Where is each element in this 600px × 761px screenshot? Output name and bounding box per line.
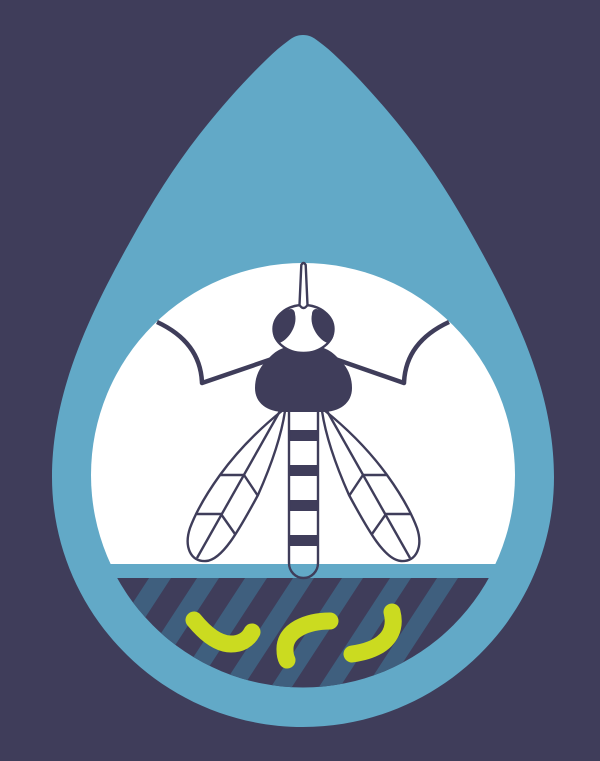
abdomen (289, 405, 318, 578)
abdomen fill above water (289, 405, 318, 564)
mosquito (157, 263, 449, 578)
left wing (188, 410, 285, 561)
water surface band (110, 564, 496, 578)
abdomen bands (289, 430, 318, 546)
thorax (255, 345, 352, 412)
right wing (322, 410, 419, 561)
abdomen outline (289, 405, 318, 578)
dark sediment (117, 578, 489, 688)
left eye (273, 309, 296, 343)
infographic: mosquito in water drop (52, 35, 554, 727)
diagonal stripes (133, 578, 458, 688)
worm larva middle (285, 621, 330, 660)
proboscis (300, 263, 308, 308)
white circle window (91, 263, 515, 687)
right eye (311, 309, 334, 343)
worm larva left (194, 620, 252, 644)
water and sediment scene (110, 564, 496, 688)
water drop (52, 35, 554, 727)
worm larva right (352, 612, 393, 654)
head (274, 305, 334, 353)
left leg (157, 322, 272, 383)
right leg (335, 322, 449, 383)
